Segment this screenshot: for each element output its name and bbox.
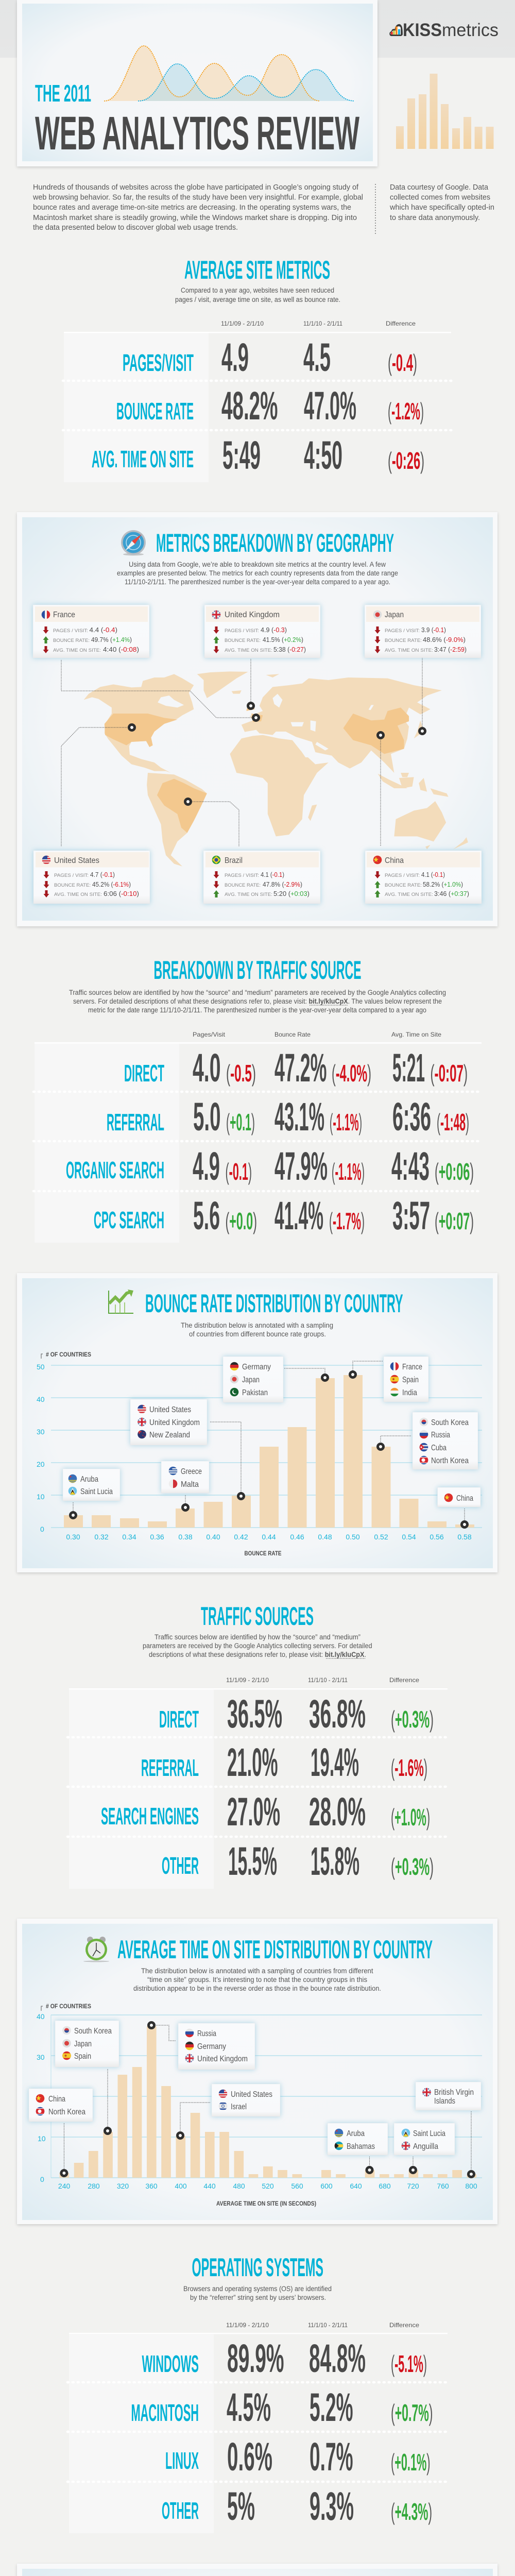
bar chart: bounce rate: 0.48: [318, 1533, 332, 1541]
bar chart: average time on site: 560: [291, 2182, 303, 2190]
callout: Greece, Malta: Malta: [181, 1480, 199, 1489]
table: operating systems: (+4.3%): [391, 2498, 432, 2525]
table: traffic source breakdown: 43.1%: [274, 1095, 324, 1139]
bar chart: bounce rate: 0.42: [234, 1533, 248, 1541]
callout: United States, Israel: United States: [231, 2090, 272, 2099]
bar chart: average time on site: # OF COUNTRIES: [46, 2004, 91, 2010]
table: site metrics: 47.0%: [304, 384, 356, 428]
bar chart: average time on site: 30: [37, 2053, 45, 2061]
table: traffic source breakdown: 5.0: [193, 1095, 220, 1139]
callout: Brazil: Brazil: [225, 856, 243, 865]
table: traffic sources: [67, 1676, 448, 1889]
callout: China: [438, 1487, 480, 1507]
text block: Traffic sources below are identified by how the “source” and “medium” parameters are received by the Google Analytics collecting: [69, 989, 446, 996]
callout: France, Spain, India: [384, 1357, 428, 1402]
table: traffic source breakdown: (-1.1%): [330, 1109, 362, 1136]
bar chart: average time on site: 440: [203, 2182, 216, 2190]
callout: United Kingdom: United Kingdom: [225, 611, 280, 619]
callout: Brazil: BOUNCE RATE:: [225, 883, 261, 888]
table: operating systems: (+0.7%): [391, 2399, 433, 2426]
table: traffic source breakdown: (-1:48): [437, 1109, 469, 1136]
callout: United States, United Kingdom, New Zealand: New Zealand: [149, 1431, 190, 1439]
title: the 2011: THE 2011: [35, 80, 91, 107]
callout: United States: AVG. TIME ON SITE:: [54, 892, 102, 897]
callout: Aruba, Bahamas: [328, 2123, 388, 2155]
callout: United Kingdom: 41.5% (+0.2%): [263, 636, 303, 643]
callout: British Virgin Islands: British Virgin: [434, 2088, 474, 2097]
bar chart: bounce rate: 0: [40, 1525, 44, 1533]
axis label: average time on site: AVERAGE TIME ON SITE (IN SECONDS): [216, 2201, 316, 2207]
world map: [84, 671, 468, 867]
callout: Greece, Malta: Greece: [181, 1467, 202, 1476]
logo: KISSmetrics: metrics: [442, 20, 499, 40]
table: traffic sources: 19.4%: [311, 1740, 359, 1785]
callout: Saint Lucia, Anguilla: Anguilla: [413, 2142, 438, 2151]
callout: South Korea, Japan, Spain: [55, 2021, 119, 2067]
table: operating systems: 5%: [227, 2484, 255, 2529]
callout: South Korea, Russia, Cuba, North Korea: Cuba: [431, 1444, 447, 1452]
callout: Germany, Japan, Pakistan: Pakistan: [242, 1388, 268, 1397]
callout: Russia, Germany, United Kingdom: Russia: [197, 2029, 216, 2038]
table: operating systems: OTHER: [162, 2497, 199, 2524]
icon: rising chart: [109, 1290, 133, 1313]
text block: data courtesy: to share data anonymously.: [390, 213, 480, 222]
table: site metrics: AVG. TIME ON SITE: [92, 446, 194, 472]
bar chart: average time on site: 360: [145, 2182, 158, 2190]
text block: [69, 989, 446, 1014]
callout: Aruba, Saint Lucia: Saint Lucia: [80, 1487, 113, 1496]
bar chart: average time on site: 480: [233, 2182, 245, 2190]
callout: United States: BOUNCE RATE:: [54, 883, 91, 888]
table: traffic source breakdown: 4:43: [391, 1144, 430, 1189]
text block: [133, 1967, 381, 1992]
text block: [117, 561, 398, 586]
table: traffic sources: OTHER: [162, 1852, 199, 1879]
table: traffic sources: REFERRAL: [141, 1754, 199, 1781]
callout: South Korea, Japan, Spain: Japan: [74, 2040, 92, 2048]
table: traffic sources: 36.8%: [309, 1692, 366, 1736]
top band: [0, 0, 515, 58]
callout: France: France: [53, 611, 75, 619]
callout: Brazil: PAGES / VISIT:: [225, 873, 259, 878]
callout: United States: 4.7 (-0.1): [90, 871, 115, 878]
callout: Aruba, Saint Lucia: [63, 1469, 120, 1501]
table: traffic source breakdown: DIRECT: [124, 1060, 164, 1087]
text block: Compared to a year ago, websites have seen reduced: [181, 286, 334, 294]
text block: data courtesy: Data courtesy of Google. Data: [390, 183, 489, 192]
table: operating systems: MACINTOSH: [131, 2399, 199, 2426]
table: site metrics: 11/1/09 - 2/1/10: [221, 320, 264, 327]
text block: by the “referrer” string sent by users’ browsers.: [190, 2294, 326, 2301]
callout: Japan: 3.9 (-0.1): [421, 626, 446, 634]
bar chart: bounce rate: 30: [37, 1428, 45, 1436]
callout: China: 4.1 (-0.1): [421, 871, 445, 878]
callout: South Korea, Russia, Cuba, North Korea: Russia: [431, 1431, 450, 1439]
table: operating systems: 89.9%: [227, 2336, 284, 2381]
bar chart: average time on site: 800: [465, 2182, 477, 2190]
callout: United Kingdom: PAGES / VISIT:: [225, 628, 259, 634]
bar chart: average time on site: 760: [437, 2182, 449, 2190]
callout: British Virgin Islands: [416, 2082, 481, 2110]
text block: introduction: [32, 183, 363, 232]
table: traffic source breakdown: Pages/Visit: [193, 1031, 226, 1038]
table: site metrics: (-0:26): [388, 447, 424, 474]
table: operating systems: 0.6%: [227, 2435, 272, 2479]
callout: France: 4.4 (-0.4): [90, 626, 117, 634]
bar chart: average time on site: 400: [175, 2182, 187, 2190]
callout: Russia, Germany, United Kingdom: [178, 2023, 255, 2070]
table: operating systems: (-5.1%): [391, 2350, 427, 2377]
bar chart: average time on site: 240: [58, 2182, 70, 2190]
table: traffic source breakdown: REFERRAL: [107, 1109, 164, 1136]
text block: introduction: the data presented below to discover global web usage trends.: [33, 223, 238, 232]
callout: Saint Lucia, Anguilla: [394, 2123, 455, 2155]
callout: France, Spain, India: India: [402, 1388, 417, 1397]
table: traffic source breakdown: Avg. Time on Site: [391, 1031, 441, 1038]
table: site metrics: 4.5: [303, 335, 331, 380]
table: operating systems: 11/1/10 - 2/1/11: [308, 2321, 348, 2329]
table: site metrics: BOUNCE RATE: [116, 398, 194, 425]
bar chart: bounce rate: 0.54: [402, 1533, 416, 1541]
panel: average site metrics: AVERAGE SITE METRICS: [184, 256, 330, 284]
callout: France, Spain, India: Spain: [402, 1376, 419, 1384]
callout: United States: United States: [54, 856, 99, 865]
text block: [143, 1633, 372, 1658]
bar chart: average time on site: 0: [40, 2175, 44, 2183]
icon: compass: [121, 530, 146, 555]
map pins: [129, 703, 425, 805]
table: operating systems: [67, 2321, 448, 2533]
table: traffic source breakdown: Bounce Rate: [274, 1031, 311, 1038]
panel: goal conversion rate distribution by country: [17, 2564, 497, 2576]
table: operating systems: 5.2%: [310, 2385, 353, 2430]
text block: 11/1/10-2/1/11. The parenthesized number is the year-over-year delta compared to a year ago.: [125, 578, 390, 586]
table: traffic source breakdown: 3:57: [392, 1194, 430, 1238]
callout: Japan: Japan: [385, 611, 404, 619]
text block: data courtesy: which have specifically opted-in: [389, 203, 494, 212]
callout: Brazil: 4.1 (-0.1): [261, 871, 284, 878]
table: traffic source breakdown: [33, 1031, 482, 1243]
bar chart: average time on site: 680: [379, 2182, 391, 2190]
panel: traffic sources: [67, 1602, 448, 1889]
text block: examples are presented below. The metrics for each country represents data from the date range: [117, 569, 398, 577]
callout: China, North Korea: [29, 2089, 93, 2122]
bar chart: bounce rate: 20: [37, 1460, 45, 1468]
panel: operating systems: [67, 2253, 448, 2533]
callout: Japan: PAGES / VISIT:: [385, 628, 420, 634]
callout: Japan: [365, 605, 481, 658]
callout: China: [365, 851, 482, 904]
bar chart: bounce rate: [37, 1352, 482, 1541]
table: traffic source breakdown: (+0:07): [435, 1208, 474, 1234]
table: site metrics: 5:49: [222, 433, 261, 478]
icon: alarm clock: [83, 1937, 109, 1962]
table: operating systems: 9.3%: [310, 2484, 354, 2529]
table: traffic source breakdown: 4.9: [193, 1144, 220, 1189]
text block: introduction: bounce rates and average time-on-site metrics are decreasing. In the operating systems wars, the: [33, 203, 351, 212]
callout: China: 58.2% (+1.0%): [423, 880, 463, 888]
table: traffic sources: 21.0%: [227, 1740, 278, 1785]
callout: China: 3:46 (+0:37): [434, 890, 469, 897]
text block: introduction: Macintosh market share is steadily growing, while the Windows market share is dropping. Dig into: [33, 213, 357, 222]
table: traffic source breakdown: (+0:06): [435, 1158, 474, 1185]
bar chart: bounce rate: 10: [37, 1493, 45, 1501]
text block: data courtesy: collected comes from websites: [390, 193, 490, 202]
table: site metrics: (-0.4): [388, 349, 417, 376]
callout: South Korea, Russia, Cuba, North Korea: North Korea: [431, 1456, 469, 1465]
callout: France, Spain, India: France: [402, 1363, 422, 1371]
table: site metrics: 48.2%: [221, 384, 278, 428]
callout: South Korea, Japan, Spain: Spain: [74, 2052, 91, 2061]
table: traffic sources: (+1.0%): [391, 1804, 430, 1831]
callout: South Korea, Russia, Cuba, North Korea: South Korea: [431, 1418, 469, 1427]
table: site metrics: [63, 320, 452, 482]
table: operating systems: 84.8%: [309, 2336, 366, 2381]
callout: Brazil: AVG. TIME ON SITE:: [225, 892, 272, 897]
text block: “time on site” groups. It’s interesting to note that the country groups in this: [147, 1976, 367, 1984]
table: operating systems: (+0.1%): [391, 2449, 431, 2476]
callout: Japan: 3:47 (-2:59): [434, 646, 467, 653]
logo: KISSmetrics: [389, 20, 499, 40]
bar chart: average time on site: [37, 2004, 482, 2190]
callout: Russia, Germany, United Kingdom: United Kingdom: [197, 2055, 248, 2063]
bar chart: bounce rate: 0.58: [457, 1533, 472, 1541]
text block: servers. For detailed descriptions of what these designations refer to, please visit: bit.ly/kluCpX. The values below represent the: [73, 997, 442, 1005]
callout: France: 4:40 (-0:08): [103, 646, 139, 653]
table: operating systems: 0.7%: [310, 2435, 353, 2479]
text block: Browsers and operating systems (OS) are identified: [183, 2285, 332, 2293]
table: traffic sources: 15.8%: [311, 1839, 359, 1884]
callout: France: AVG. TIME ON SITE:: [53, 648, 101, 653]
text block: of countries from different bounce rate groups.: [189, 1330, 326, 1338]
bar chart: bounce rate: 0.36: [150, 1533, 164, 1541]
table: traffic source breakdown: 5.6: [193, 1194, 220, 1238]
bar chart: bounce rate: 0.32: [94, 1533, 109, 1541]
callout: Brazil: 47.8% (-2.9%): [263, 880, 302, 888]
table: traffic source breakdown: (-4.0%): [332, 1060, 371, 1087]
bar chart: bounce rate: 0.40: [206, 1533, 220, 1541]
bar chart: bounce rate: # OF COUNTRIES: [46, 1352, 91, 1358]
table: traffic source breakdown: 6:36: [392, 1095, 431, 1139]
table: traffic source breakdown: (-1.1%): [332, 1158, 365, 1185]
callout: Japan: 48.6% (-9.0%): [423, 636, 466, 643]
text block: pages / visit, average time on site, as well as bounce rate.: [175, 296, 340, 303]
text block: distribution appear to be in the reverse order as those in the bounce rate distribution.: [133, 1985, 381, 1992]
callout: United States: 6:06 (-0:10): [104, 890, 139, 897]
callout: China, North Korea: North Korea: [48, 2108, 85, 2116]
callout: United States: [33, 851, 150, 904]
callout: China: BOUNCE RATE:: [385, 883, 422, 888]
text block: The distribution below is annotated with a sampling: [181, 1321, 333, 1329]
table: traffic source breakdown: CPC SEARCH: [94, 1207, 164, 1233]
table: operating systems: WINDOWS: [142, 2350, 199, 2377]
text block: data courtesy: [389, 183, 494, 222]
callout: United Kingdom: BOUNCE RATE:: [225, 638, 261, 643]
bar chart: bounce rate: 40: [37, 1395, 45, 1403]
callout: Germany, Japan, Pakistan: Germany: [242, 1363, 271, 1371]
table: operating systems: 4.5%: [227, 2385, 271, 2430]
table: traffic sources: (+0.3%): [391, 1853, 434, 1880]
table: traffic sources: 28.0%: [309, 1790, 366, 1834]
table: traffic source breakdown: 47.9%: [274, 1144, 328, 1189]
bar chart: average time on site: 280: [88, 2182, 100, 2190]
panel: bounce rate distribution by country: [17, 1273, 497, 1572]
bar chart: bounce rate: 0.52: [374, 1533, 388, 1541]
table: traffic sources: Difference: [389, 1676, 419, 1684]
chart: overlapping distribution curves: [105, 46, 355, 101]
table: traffic source breakdown: 41.4%: [274, 1194, 323, 1238]
table: traffic sources: SEARCH ENGINES: [101, 1803, 199, 1829]
bar chart: bounce rate: 0.46: [290, 1533, 304, 1541]
callout: Greece, Malta: [161, 1461, 209, 1493]
callout: China, North Korea: China: [48, 2095, 65, 2104]
table: site metrics: PAGES/VISIT: [123, 349, 194, 376]
bar chart: average time on site: 20: [37, 2094, 45, 2102]
table: traffic sources: (+0.3%): [391, 1706, 434, 1733]
axis label: bounce rate: BOUNCE RATE: [244, 1551, 282, 1557]
callout: United States: PAGES / VISIT:: [54, 873, 89, 878]
decorative bar chart: [396, 74, 493, 149]
table: traffic sources: 15.5%: [228, 1839, 277, 1884]
text block: Traffic sources below are identified by how the “source” and “medium”: [154, 1633, 360, 1641]
table: operating systems: LINUX: [165, 2447, 199, 2474]
callout: Brazil: 5:20 (+0:03): [273, 890, 310, 897]
table: traffic source breakdown: (+0.1): [226, 1109, 255, 1136]
panel: traffic sources: TRAFFIC SOURCES: [201, 1602, 314, 1631]
callout: Germany, Japan, Pakistan: [223, 1357, 283, 1402]
bar chart: average time on site: 320: [117, 2182, 129, 2190]
callout: South Korea, Russia, Cuba, North Korea: [413, 1412, 478, 1469]
callout: China: AVG. TIME ON SITE:: [385, 892, 433, 897]
bar chart: average time on site: 720: [407, 2182, 419, 2190]
callout: United Kingdom: 4.9 (-0.3): [261, 626, 287, 634]
table: traffic source breakdown: 5:21: [392, 1046, 425, 1090]
callout: United States, United Kingdom, New Zealand: United Kingdom: [149, 1418, 200, 1427]
callout: Saint Lucia, Anguilla: Saint Lucia: [413, 2129, 445, 2138]
bar chart: bounce rate: 0.44: [262, 1533, 276, 1541]
callout: United States, United Kingdom, New Zealand: United States: [149, 1405, 191, 1414]
table: site metrics: Difference: [386, 320, 416, 327]
panel: operating systems: OPERATING SYSTEMS: [192, 2253, 323, 2282]
logo: KISSmetrics: KISS: [403, 20, 442, 40]
panel: breakdown by traffic source: [33, 956, 482, 1243]
table: operating systems: Difference: [389, 2321, 419, 2329]
table: traffic source breakdown: (-0.1): [226, 1158, 252, 1185]
callout: United Kingdom: [204, 605, 320, 658]
bar chart: bounce rate: 0.38: [178, 1533, 193, 1541]
text block: [183, 2285, 332, 2301]
bar chart: average time on site: 600: [320, 2182, 333, 2190]
table: traffic sources: 11/1/09 - 2/1/10: [226, 1676, 269, 1684]
bar chart: average time on site: 520: [262, 2182, 274, 2190]
table: site metrics: 4:50: [304, 433, 342, 478]
text block: introduction: Hundreds of thousands of websites across the globe have participated in Google’s ongoing study of: [33, 183, 359, 192]
callout: Japan: BOUNCE RATE:: [385, 638, 422, 643]
panel: average time on site distribution by country: [17, 1919, 497, 2224]
panel: average site metrics: [63, 256, 452, 482]
table: site metrics: (-1.2%): [388, 398, 424, 425]
callout: United States: 45.2% (-6.1%): [92, 880, 131, 888]
callout: Aruba, Saint Lucia: Aruba: [80, 1475, 98, 1484]
callout: South Korea, Japan, Spain: South Korea: [74, 2027, 112, 2036]
callout: United Kingdom: 5:38 (-0:27): [273, 646, 306, 653]
callout: France: PAGES / VISIT:: [53, 628, 88, 634]
table: operating systems: 11/1/09 - 2/1/10: [226, 2321, 269, 2329]
table: traffic sources: 11/1/10 - 2/1/11: [308, 1676, 348, 1684]
table: traffic source breakdown: ORGANIC SEARCH: [66, 1157, 164, 1183]
callout: British Virgin Islands: Islands: [434, 2097, 455, 2106]
bar chart: average time on site: 10: [38, 2134, 46, 2143]
table: traffic sources: 36.5%: [227, 1692, 282, 1736]
text block: metric for the date range 11/1/10-2/1/11. The parenthesized number is the year-over-year delta compared to a year ago: [88, 1006, 426, 1014]
bar chart: bounce rate: 0.56: [430, 1533, 444, 1541]
table: traffic source breakdown: (-1.7%): [329, 1208, 365, 1234]
bar chart: bounce rate: 0.34: [122, 1533, 136, 1541]
table: traffic sources: (-1.6%): [391, 1754, 427, 1781]
text block: introduction: web browsing behavior. So far, the results of the study have been very insightful. For example, global: [32, 193, 363, 202]
table: traffic source breakdown: (-0:07): [431, 1060, 468, 1087]
bar chart: bounce rate: 50: [37, 1363, 45, 1371]
table: site metrics: 4.9: [221, 335, 249, 380]
callout: Brazil: [203, 851, 320, 904]
callout: United States, Israel: [212, 2084, 280, 2116]
callout: Aruba, Bahamas: Aruba: [347, 2129, 365, 2138]
connector lines: [61, 658, 422, 846]
text block: The distribution below is annotated with a sampling of countries from different: [141, 1967, 373, 1975]
callout: United Kingdom: AVG. TIME ON SITE:: [225, 648, 272, 653]
callout: Germany, Japan, Pakistan: Japan: [242, 1376, 260, 1384]
table: traffic source breakdown: (+0.0): [226, 1208, 257, 1234]
bar chart: bounce rate: 0.30: [66, 1533, 80, 1541]
callout: France: [33, 605, 149, 658]
table: traffic source breakdown: 4.0: [193, 1046, 220, 1090]
callout: France: 49.7% (+1.4%): [91, 636, 132, 643]
text block: descriptions of what these designations refer to, please visit: bit.ly/kluCpX.: [149, 1651, 366, 1658]
callout: France: BOUNCE RATE:: [53, 638, 90, 643]
callout: China: China: [456, 1494, 473, 1503]
panel: metrics breakdown by geography: [17, 512, 497, 926]
table: site metrics: 11/1/10 - 2/1/11: [303, 320, 342, 327]
bar chart: average time on site: 640: [350, 2182, 362, 2190]
bar chart: bounce rate: 0.50: [346, 1533, 360, 1541]
callout: United States, United Kingdom, New Zealand: [130, 1399, 207, 1445]
text block: parameters are received by the Google Analytics collecting servers. For detailed: [143, 1642, 372, 1650]
callout: Russia, Germany, United Kingdom: Germany: [197, 2042, 226, 2051]
text block: [181, 1321, 333, 1338]
table: traffic sources: DIRECT: [159, 1706, 199, 1733]
callout: China: PAGES / VISIT:: [385, 873, 420, 878]
table: traffic sources: 27.0%: [227, 1790, 280, 1834]
bar chart: average time on site: 40: [37, 2012, 45, 2021]
text block: [175, 286, 340, 303]
callout: Japan: AVG. TIME ON SITE:: [385, 648, 433, 653]
table: traffic source breakdown: 47.2%: [274, 1046, 327, 1090]
callout: Aruba, Bahamas: Bahamas: [347, 2142, 375, 2151]
table: traffic source breakdown: (-0.5): [226, 1060, 256, 1087]
callout: United States, Israel: Israel: [231, 2103, 247, 2111]
text block: Using data from Google, we’re able to breakdown site metrics at the country level. A few: [129, 561, 386, 568]
callout: China: China: [385, 856, 404, 865]
panel: title: [17, 0, 377, 166]
